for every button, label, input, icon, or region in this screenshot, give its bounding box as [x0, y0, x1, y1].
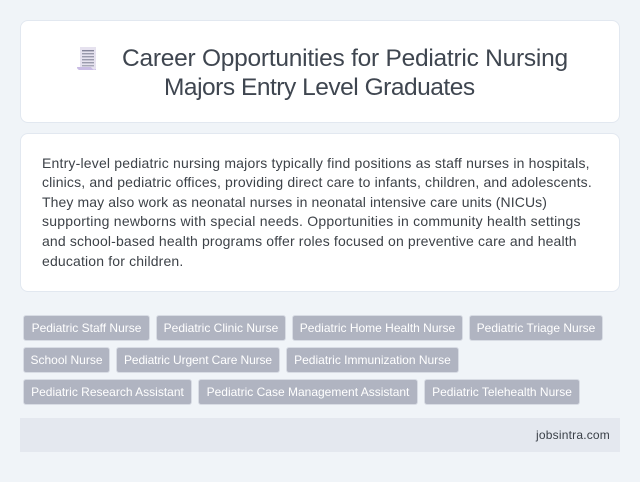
tag: Pediatric Staff Nurse	[32, 321, 141, 335]
tag	[23, 347, 110, 373]
footer bar	[20, 418, 620, 452]
footer source: jobsintra.com	[536, 428, 610, 442]
tag: Pediatric Triage Nurse	[477, 321, 595, 335]
title: Career Opportunities for Pediatric Nursing	[122, 45, 568, 72]
tag: Pediatric Research Assistant	[31, 385, 184, 399]
description text: Entry-level pediatric nursing majors typically find positions as staff nurses in hospitals,	[42, 155, 590, 171]
tag	[292, 315, 463, 341]
description text: and school-based health programs offer roles focused on preventive care and health	[42, 233, 577, 249]
tag: Pediatric Clinic Nurse	[164, 321, 278, 335]
tag: School Nurse	[30, 353, 103, 367]
tag	[286, 347, 459, 373]
tag	[23, 315, 150, 341]
description text	[42, 155, 592, 269]
tag	[469, 315, 603, 341]
tag: Pediatric Urgent Care Nurse	[124, 353, 272, 367]
description text: clinics, and pediatric offices, providing direct care to infants, children, and adolescents.	[42, 174, 592, 190]
description text: education for children.	[42, 253, 183, 269]
tag	[198, 379, 418, 405]
job tags	[23, 315, 603, 405]
tag: Pediatric Immunization Nurse	[294, 353, 451, 367]
tag	[23, 379, 192, 405]
icon: paper scroll	[77, 47, 96, 70]
title	[122, 45, 568, 101]
tag	[424, 379, 580, 405]
tag: Pediatric Case Management Assistant	[207, 385, 409, 399]
description text: They may also work as neonatal nurses in neonatal intensive care units (NICUs)	[42, 194, 547, 210]
tag	[116, 347, 280, 373]
tag: Pediatric Home Health Nurse	[300, 321, 455, 335]
panel: description card	[20, 133, 620, 292]
title: Majors Entry Level Graduates	[164, 74, 475, 101]
panel: title card	[20, 20, 620, 123]
description text: supporting newborns with special needs. Opportunities in community health settings	[42, 213, 581, 229]
tag	[156, 315, 286, 341]
tag: Pediatric Telehealth Nurse	[432, 385, 572, 399]
